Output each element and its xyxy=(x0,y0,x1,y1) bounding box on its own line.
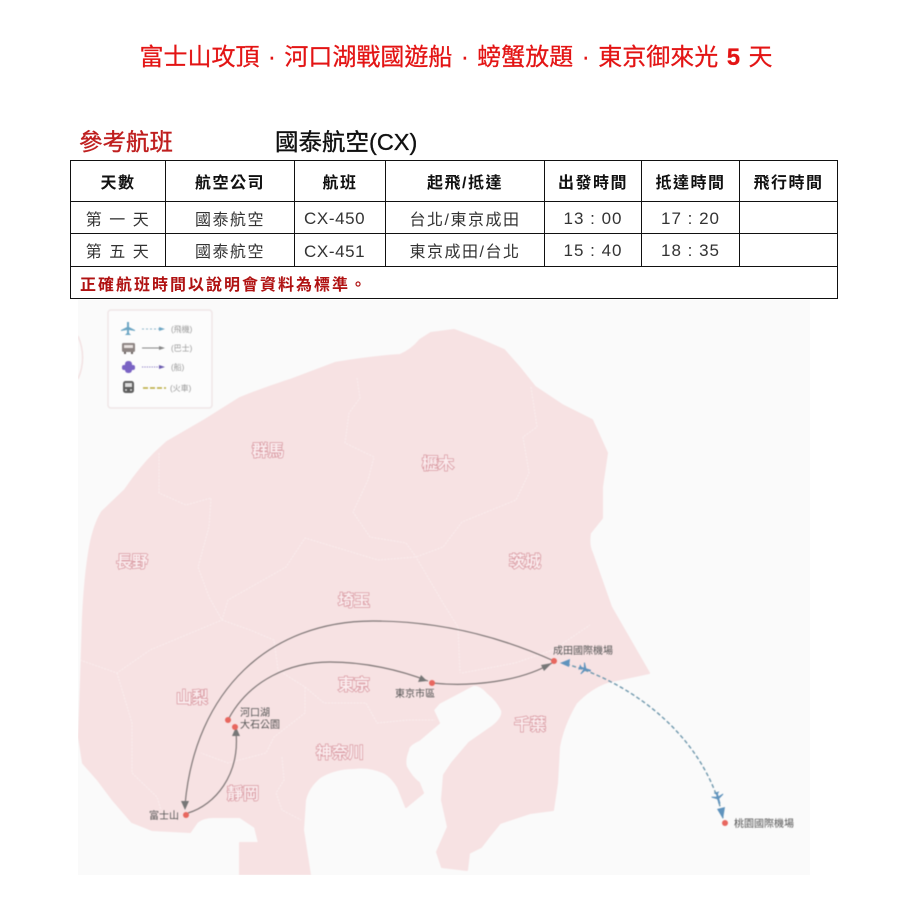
prefecture labels: 靜岡 xyxy=(227,785,259,803)
heading: reference flights: 參考航班 xyxy=(79,129,173,155)
table header row: 航空公司 xyxy=(195,175,265,192)
prefecture labels: 千葉 xyxy=(514,716,546,734)
prefecture labels: 東京 xyxy=(338,675,370,694)
partial circle at left edge xyxy=(78,336,82,379)
flight row: day 1: CX-450 xyxy=(304,209,365,228)
table header row: 航班 xyxy=(322,175,358,192)
flight row: day 5 xyxy=(86,241,720,261)
flight row: day 1: 國泰航空 xyxy=(195,212,265,228)
flight arrowheads xyxy=(560,659,725,819)
prefecture labels: 櫪木 xyxy=(422,454,454,473)
icon: train legend xyxy=(123,381,134,393)
legend arrow: flight xyxy=(142,327,165,331)
flight row: day 5: 18 : 35 xyxy=(661,241,720,260)
legend text: train: (火車) xyxy=(170,383,192,393)
prefecture labels: 神奈川 xyxy=(316,743,364,762)
legend xyxy=(108,310,212,408)
icon: bus legend xyxy=(122,343,135,354)
prefecture boundaries xyxy=(80,378,590,820)
prefecture labels: 埼玉 xyxy=(338,592,370,610)
flight row: day 1: 第 一 天 xyxy=(86,212,150,228)
icon: plane legend xyxy=(121,322,135,335)
title: 富士山攻頂 · 河口湖戰國遊船 · 螃蟹放題 · 東京御來光 5 天 xyxy=(139,44,773,71)
route map xyxy=(78,300,810,875)
prefecture labels: 長野 xyxy=(116,553,148,571)
icon: plane near Taoyuan xyxy=(711,791,725,805)
location labels: 河口湖 xyxy=(240,707,270,719)
prefecture labels: 群馬 xyxy=(252,442,284,460)
prefecture labels: 茨城 xyxy=(509,552,541,571)
flight row: day 1: 13 : 00 xyxy=(564,208,622,228)
flight row: day 1: 台北/東京成田 xyxy=(410,212,520,228)
legend arrow: ship xyxy=(142,365,165,369)
location labels: 桃園國際機場 xyxy=(734,817,794,830)
flight row: day 1 xyxy=(86,208,720,228)
legend line: train xyxy=(143,387,166,389)
table header row: 天數 xyxy=(100,175,136,192)
table header row: 飛行時間 xyxy=(753,175,824,192)
prefecture labels: 山梨 xyxy=(176,689,208,707)
prefecture labels xyxy=(116,442,546,803)
legend text: ship: (船) xyxy=(171,362,185,372)
table note: 正確航班時間以說明會資料為標準。 xyxy=(80,276,368,294)
table header row: 抵達時間 xyxy=(655,175,726,192)
land mass xyxy=(79,330,649,875)
flight row: day 5: 國泰航空 xyxy=(195,244,265,261)
flight row: day 1: 17 : 20 xyxy=(661,208,720,228)
legend text: bus: (巴士) xyxy=(171,343,193,353)
location labels: 大石公園 xyxy=(240,718,280,731)
heading: airline: 國泰航空(CX) xyxy=(275,129,417,155)
location dots xyxy=(183,658,728,826)
icon: plane near Narita xyxy=(577,661,593,677)
table header row: 出發時間 xyxy=(558,175,628,192)
bus routes xyxy=(185,621,554,813)
flight route xyxy=(566,664,723,818)
table header row xyxy=(80,174,824,294)
map background xyxy=(78,300,810,875)
flight row: day 5: 15 : 40 xyxy=(564,241,622,260)
legend arrow: bus xyxy=(142,346,165,350)
location labels: 成田國際機場 xyxy=(553,644,613,657)
legend box xyxy=(108,310,212,408)
flight row: day 5: CX-451 xyxy=(304,242,365,260)
flight table xyxy=(70,160,838,299)
legend text: flight: (飛機) xyxy=(171,324,193,334)
route arrowheads xyxy=(181,663,552,810)
location labels: 東京市區 xyxy=(395,687,435,700)
flight row: day 5: 東京成田/台北 xyxy=(410,244,520,261)
location labels xyxy=(149,644,794,830)
icon: ship legend xyxy=(122,361,135,373)
flight row: day 5: 第 五 天 xyxy=(86,244,150,261)
table header row: 起飛/抵達 xyxy=(427,175,503,192)
location labels: 富士山 xyxy=(149,809,179,822)
